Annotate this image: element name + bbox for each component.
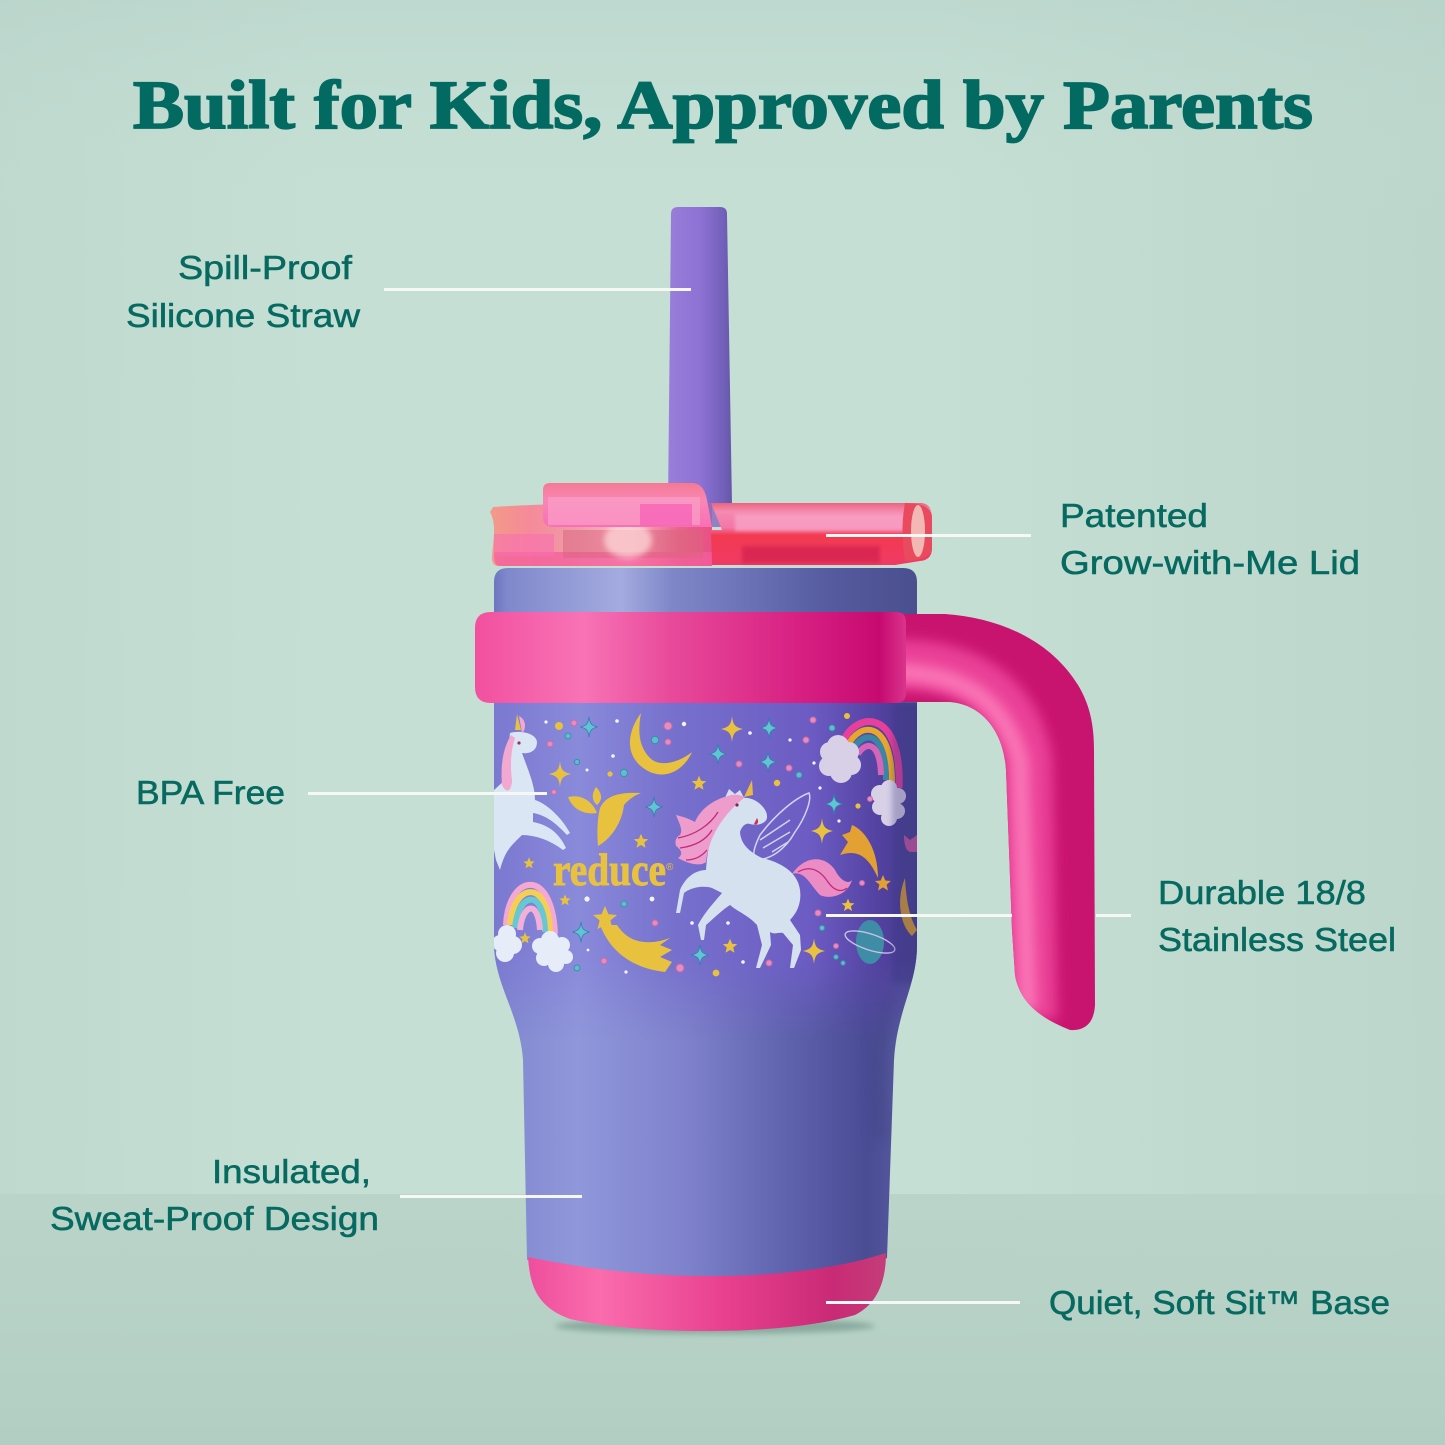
reduce logo: ® bbox=[666, 862, 674, 873]
grip band bbox=[475, 612, 906, 703]
callout: insulated design: Sweat-Proof Design bbox=[50, 1200, 379, 1237]
rainbow bottom left bbox=[506, 885, 555, 934]
body bbox=[676, 789, 801, 968]
tail bbox=[792, 859, 852, 897]
planet bbox=[843, 920, 897, 964]
callout: BPA free bbox=[136, 774, 547, 811]
mane bbox=[675, 795, 745, 864]
title: Built for Kids, Approved by Parents bbox=[133, 67, 1313, 143]
callout: spill-proof straw: Spill-Proof bbox=[178, 249, 353, 286]
right edge shade over print bbox=[892, 703, 922, 983]
body contour shadows bbox=[878, 990, 890, 1140]
reduce logo: reduce bbox=[553, 845, 666, 895]
transparent pink lid bbox=[490, 483, 932, 566]
wing bbox=[754, 793, 810, 860]
yellow stars bbox=[519, 776, 854, 953]
callout: grow-with-me lid: Patented bbox=[1060, 497, 1208, 534]
tumbler neck bbox=[494, 568, 917, 615]
horn bbox=[744, 780, 753, 797]
handle bbox=[890, 614, 1095, 1030]
callout: stainless steel: Durable 18/8 bbox=[1158, 874, 1366, 911]
callout: spill-proof straw bbox=[126, 249, 691, 334]
blue sparkles bbox=[572, 717, 843, 965]
callout: insulated design: Insulated, bbox=[212, 1153, 371, 1190]
teal dots bbox=[565, 725, 845, 971]
callout: soft sit base: Quiet, Soft Sit™ Base bbox=[1049, 1284, 1390, 1321]
shooting star yellow bbox=[593, 906, 672, 972]
clouds bottom left bbox=[492, 925, 573, 972]
straw bbox=[668, 207, 732, 505]
shooting star orange bbox=[840, 825, 891, 890]
callout: stainless steel: Stainless Steel bbox=[1158, 921, 1396, 958]
reduce logo bbox=[553, 787, 674, 895]
straw through lid bbox=[708, 503, 733, 527]
yellow sparkles bbox=[549, 716, 833, 964]
white dots bbox=[544, 719, 841, 974]
callout: BPA free: BPA Free bbox=[136, 774, 285, 811]
clouds top right bbox=[819, 735, 906, 826]
callout: grow-with-me lid bbox=[826, 497, 1360, 581]
lid base bbox=[490, 503, 712, 566]
pink dots bbox=[547, 717, 872, 972]
left unicorn bbox=[494, 714, 570, 870]
gold dots bbox=[555, 713, 861, 976]
orange crescent and pink cat bbox=[900, 835, 917, 936]
callout: grow-with-me lid: Grow-with-Me Lid bbox=[1060, 544, 1360, 581]
lid top tab bbox=[543, 483, 712, 527]
silicone base bbox=[528, 1253, 886, 1331]
tumbler body bbox=[494, 700, 917, 1277]
printed unicorn pattern bbox=[492, 703, 922, 1043]
callout: insulated design bbox=[50, 1153, 582, 1237]
rainbow top right bbox=[843, 722, 899, 788]
lid right slab bbox=[711, 503, 932, 565]
callout: stainless steel bbox=[826, 874, 1396, 958]
main unicorn bbox=[675, 780, 852, 968]
callout: soft sit base bbox=[826, 1284, 1390, 1321]
base contact shadow bbox=[555, 1318, 875, 1334]
crescent moon bbox=[630, 713, 692, 775]
tumbler product bbox=[475, 207, 1095, 1331]
callout: spill-proof straw: Silicone Straw bbox=[126, 297, 360, 334]
face bbox=[754, 818, 758, 825]
